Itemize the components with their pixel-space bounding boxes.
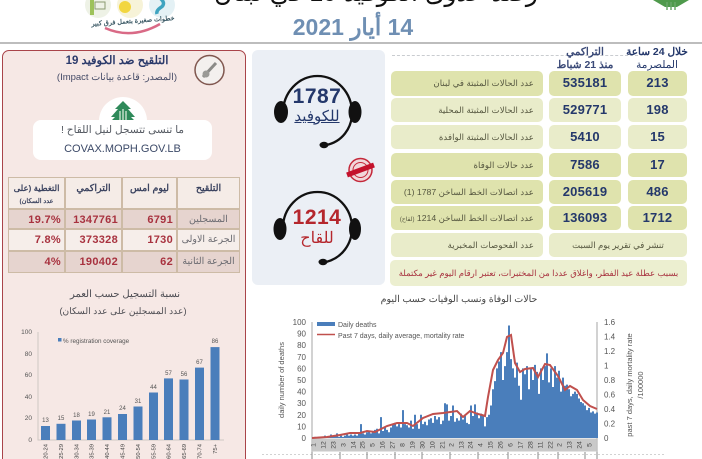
- dotted header line: [392, 55, 638, 56]
- row: hotline 1214 calls: 1712: [643, 210, 672, 225]
- combo chart: daily deaths and mortality rate: 3: [340, 443, 348, 447]
- icon: vaccine circle: [194, 54, 225, 86]
- combo chart: daily deaths and mortality rate: 17: [518, 441, 524, 449]
- notice: incomplete data: بسبب عطلة عيد الفطر، واغلاق عددا من المختبرات، تعتبر ارقام اليوم غير مكتملة: [399, 268, 678, 278]
- column header: cumulative: التراكمي: [566, 46, 604, 58]
- icon: headset covid hotline: [274, 74, 362, 148]
- chart title: حالات الوفاة ونسب الوفيات حسب اليوم: [381, 294, 537, 305]
- combo chart: daily deaths and mortality rate: 100: [293, 318, 307, 327]
- row: imported cases: عدد الحالات المثبتة الوافدة: [439, 132, 534, 142]
- combo chart: daily deaths and mortality rate: 5: [586, 443, 594, 447]
- combo chart: daily deaths and mortality rate: 70: [297, 353, 307, 362]
- card text: COVAX.MOPH.GOV.LB: [64, 143, 181, 155]
- combo chart: daily deaths and mortality rate: 10: [430, 441, 436, 449]
- bar chart: registration coverage by age: 15: [58, 416, 65, 422]
- row: imported cases: [391, 125, 687, 149]
- source note: (المصدر: قاعدة بيانات Impact): [57, 72, 177, 83]
- row: deaths: عدد حالات الوفاة: [474, 160, 534, 170]
- combo chart: daily deaths and mortality rate: 12: [320, 441, 328, 449]
- table: vaccination numbers: المسجلين: [189, 214, 228, 225]
- combo chart: daily deaths and mortality rate: 0: [302, 434, 307, 443]
- combo chart: daily deaths and mortality rate: 28: [528, 441, 534, 449]
- combo chart: daily deaths and mortality rate: 0.4: [604, 405, 616, 414]
- combo chart: daily deaths and mortality rate: 26: [498, 441, 504, 449]
- bar chart: registration coverage by age: 31: [135, 399, 142, 405]
- row: local cases: عدد الحالات المثبتة المحلية: [438, 105, 534, 115]
- row: hotline 1787 calls: 486: [646, 184, 669, 199]
- combo chart: daily deaths and mortality rate: 50: [297, 376, 307, 385]
- row: hotline 1787 calls: عدد اتصالات الخط الساخن 1787 (1): [404, 187, 534, 197]
- bar chart: registration coverage by age: 40-44: [105, 443, 111, 459]
- combo chart: daily deaths and mortality rate: 40: [297, 388, 307, 397]
- combo chart: daily deaths and mortality rate: 1: [310, 443, 318, 447]
- callout: registration card: [33, 97, 212, 160]
- header rule: [0, 42, 702, 44]
- combo chart: daily deaths and mortality rate: 5: [370, 443, 376, 447]
- combo chart: daily deaths and mortality rate: 24: [576, 441, 584, 449]
- combo chart: daily deaths and mortality rate: 30: [420, 441, 426, 449]
- combo chart: daily deaths and mortality rate: 1.4: [604, 332, 616, 342]
- bar chart: registration coverage by age: 60-64: [166, 443, 172, 459]
- hotline number 1787: 1787: [293, 85, 341, 108]
- row: lab tests: [391, 233, 687, 257]
- heading: vaccination: التلقيح ضد الكوفيد 19: [66, 55, 168, 67]
- bar chart: registration coverage by age: 19: [88, 412, 95, 418]
- combo chart: daily deaths and mortality rate: 60: [297, 364, 307, 373]
- notice: incomplete data: [390, 260, 687, 286]
- combo chart: daily deaths and mortality rate: Past 7 days, daily average, mortality rate: [338, 333, 465, 340]
- combo chart: daily deaths and mortality rate: 22: [548, 441, 554, 449]
- table: vaccination numbers: 1347761: [73, 214, 118, 226]
- row: deaths: 17: [650, 157, 665, 172]
- hotline number 1214: 1214: [293, 206, 341, 229]
- row: imported cases: 15: [650, 129, 665, 144]
- combo chart: daily deaths and mortality rate: 15: [488, 441, 494, 449]
- panel: vaccination: [2, 50, 246, 459]
- bar chart: registration coverage by age: 86: [212, 339, 219, 345]
- table: vaccination numbers: 190402: [79, 256, 118, 268]
- table: vaccination numbers: عدد السكان): [19, 198, 54, 205]
- column header: last 24 hours: [626, 46, 688, 71]
- column header: last 24 hours: الملصرمة: [636, 59, 678, 71]
- bar chart: registration coverage by age: % registration coverage: [63, 338, 130, 345]
- bar chart: registration coverage by age: 44: [150, 385, 157, 391]
- combo chart: daily deaths and mortality rate: 23: [330, 441, 338, 449]
- table: vaccination numbers: [8, 177, 240, 273]
- combo chart: daily deaths and mortality rate: 0.6: [604, 390, 616, 400]
- combo chart: daily deaths and mortality rate: 20: [297, 411, 307, 420]
- card text: [33, 120, 212, 160]
- row: hotline 1787 calls: 205619: [563, 184, 607, 199]
- bar chart: registration coverage by age: 30-34: [74, 443, 80, 459]
- table: vaccination numbers: التراكمي: [76, 183, 111, 194]
- table: vaccination numbers: 373328: [79, 234, 118, 246]
- row: confirmed cases in Lebanon: عدد الحالات المثبتة في لبنان: [433, 78, 534, 88]
- bar chart: registration coverage by age: 13: [42, 418, 49, 424]
- combo chart: daily deaths and mortality rate: daily number of deaths: [277, 342, 286, 418]
- combo chart: daily deaths and mortality rate: 14: [350, 441, 358, 449]
- combo chart: daily deaths and mortality rate: 1.2: [604, 347, 616, 356]
- column header: cumulative: [557, 46, 613, 71]
- row: lab tests: تنشر في تقرير يوم السبت: [572, 240, 664, 250]
- heading: registration by age: نسبة التسجيل حسب العمر: [70, 289, 180, 300]
- panel: hotlines: [252, 50, 385, 285]
- combo chart: daily deaths and mortality rate: 19: [410, 441, 416, 449]
- row: local cases: [391, 98, 687, 122]
- row: hotline 1214 calls: 136093: [563, 210, 607, 225]
- bar chart: registration coverage by age: [21, 329, 224, 459]
- combo chart: daily deaths and mortality rate: 80: [297, 341, 307, 350]
- bar chart: registration coverage by age: 40: [25, 394, 32, 401]
- combo chart: daily deaths and mortality rate: 10: [297, 422, 307, 431]
- column header: cumulative: منذ 21 شباط: [557, 59, 613, 71]
- table: vaccination numbers: 6791: [147, 214, 173, 226]
- combo chart: daily deaths and mortality rate: 4: [478, 443, 484, 447]
- bar chart: registration coverage by age: 67: [196, 360, 203, 366]
- bar chart: registration coverage by age: 55-59: [152, 444, 158, 459]
- combo chart: daily deaths and mortality rate: 30: [297, 399, 307, 408]
- bar chart: registration coverage by age: 80: [25, 351, 32, 358]
- combo chart: daily deaths and mortality rate: 8: [400, 443, 406, 447]
- combo chart: daily deaths and mortality rate: 21: [440, 441, 446, 449]
- bar chart: registration coverage by age: 60: [25, 372, 32, 379]
- header: campaign logos: خطوات صغيرة بتعمل فرق كبير: [90, 14, 175, 28]
- header: campaign logos: [85, 0, 175, 34]
- table: vaccination numbers: الجرعة الثانية: [182, 256, 235, 267]
- row: hotline 1214 calls: عدد اتصالات الخط الساخن 1214 (لقاح): [400, 213, 534, 223]
- combo chart: daily deaths and mortality rate: 13: [458, 441, 466, 449]
- combo chart: daily deaths and mortality rate: 27: [390, 441, 396, 449]
- combo chart: daily deaths and mortality rate: 6: [508, 443, 514, 447]
- table: vaccination numbers: ليوم امس: [130, 183, 169, 194]
- row: confirmed cases in Lebanon: 535181: [563, 75, 607, 90]
- bar chart: registration coverage by age: 75+: [213, 443, 219, 454]
- date: 14 أيار 2021: [293, 14, 413, 40]
- bar chart: registration coverage by age: 18: [73, 413, 80, 419]
- icon: red stamp: [346, 158, 375, 182]
- bar chart: registration coverage by age: 20-24: [44, 443, 50, 459]
- table: vaccination numbers: 4%: [44, 256, 61, 268]
- combo chart: daily deaths and mortality rate: 1: [604, 362, 609, 370]
- row: lab tests: عدد الفحوصات المخبرية: [448, 240, 534, 250]
- combo chart: daily deaths and mortality rate: 24: [468, 441, 474, 449]
- combo chart: daily deaths and mortality rate: [262, 318, 664, 459]
- bar chart: registration coverage by age: 25-29: [59, 444, 65, 459]
- combo chart: daily deaths and mortality rate: 25: [360, 441, 366, 449]
- row: confirmed cases in Lebanon: 213: [646, 75, 669, 90]
- combo chart: daily deaths and mortality rate: /100000: [636, 371, 645, 399]
- bar chart: registration coverage by age: 20: [25, 415, 32, 422]
- combo chart: daily deaths and mortality rate: past 7 days, daily mortality rate: [625, 333, 634, 437]
- table: vaccination numbers: التلقيح: [196, 183, 221, 194]
- row: local cases: 198: [646, 102, 669, 117]
- table: vaccination numbers: الجرعة الاولى: [182, 234, 235, 245]
- hotline label covid: للكوفيد: [294, 108, 340, 125]
- row: imported cases: 5410: [570, 129, 600, 144]
- hotline label vaccine: للقاح: [300, 230, 334, 247]
- combo chart: daily deaths and mortality rate: 0.2: [604, 420, 616, 428]
- combo chart: daily deaths and mortality rate: 90: [297, 330, 307, 339]
- row: deaths: 7586: [570, 157, 600, 172]
- row: deaths: [391, 153, 687, 177]
- row: hotline 1214 calls: [391, 206, 687, 230]
- table: vaccination numbers: 7.8%: [35, 234, 61, 246]
- icon: headset vaccine hotline: [274, 190, 361, 266]
- bar chart: registration coverage by age: 56: [181, 372, 188, 378]
- combo chart: daily deaths and mortality rate: Daily deaths: [338, 322, 377, 329]
- combo chart: daily deaths and mortality rate: 11: [538, 441, 544, 449]
- row: local cases: 529771: [563, 102, 607, 117]
- bar chart: registration coverage by age: 35-39: [90, 444, 96, 459]
- combo chart: daily deaths and mortality rate: 2: [448, 443, 456, 447]
- bar chart: registration coverage by age: 57: [165, 371, 172, 377]
- combo chart: daily deaths and mortality rate: 0.8: [604, 376, 616, 385]
- column header: last 24 hours: خلال 24 ساعة: [626, 46, 688, 58]
- icon: cedar badge: [99, 97, 147, 120]
- table: vaccination numbers: 1730: [147, 234, 173, 246]
- combo chart: daily deaths and mortality rate: 13: [566, 441, 574, 449]
- bar chart: registration coverage by age: 45-49: [120, 444, 126, 459]
- bar chart: registration coverage by age: 21: [104, 410, 111, 416]
- card text: ما تنسى تتسجل لنيل اللقاح !: [61, 124, 184, 136]
- bar chart: registration coverage by age: 100: [21, 329, 32, 336]
- combo chart: daily deaths and mortality rate: 0: [604, 434, 609, 443]
- subheading: registration by age: (عدد المسجلين على عدد السكان): [59, 306, 187, 316]
- table: vaccination numbers: 62: [160, 256, 173, 268]
- table: vaccination numbers: التغطية (على: [14, 183, 59, 193]
- icon: cedar logo top right: [653, 0, 689, 10]
- bar chart: registration coverage by age: 24: [119, 406, 126, 412]
- bar chart: registration coverage by age: 70-74: [198, 443, 204, 459]
- bar chart: registration coverage by age: 0: [28, 437, 32, 444]
- row: confirmed cases in Lebanon: [391, 71, 687, 96]
- row: hotline 1787 calls: [391, 180, 687, 204]
- table: vaccination numbers: 19.7%: [28, 214, 61, 226]
- combo chart: daily deaths and mortality rate: 1.6: [604, 318, 616, 327]
- bar chart: registration coverage by age: 65-69: [182, 444, 188, 459]
- combo chart: daily deaths and mortality rate: 16: [380, 441, 386, 449]
- bar chart: registration coverage by age: 50-54: [136, 443, 142, 459]
- combo chart: daily deaths and mortality rate: 2: [556, 443, 564, 447]
